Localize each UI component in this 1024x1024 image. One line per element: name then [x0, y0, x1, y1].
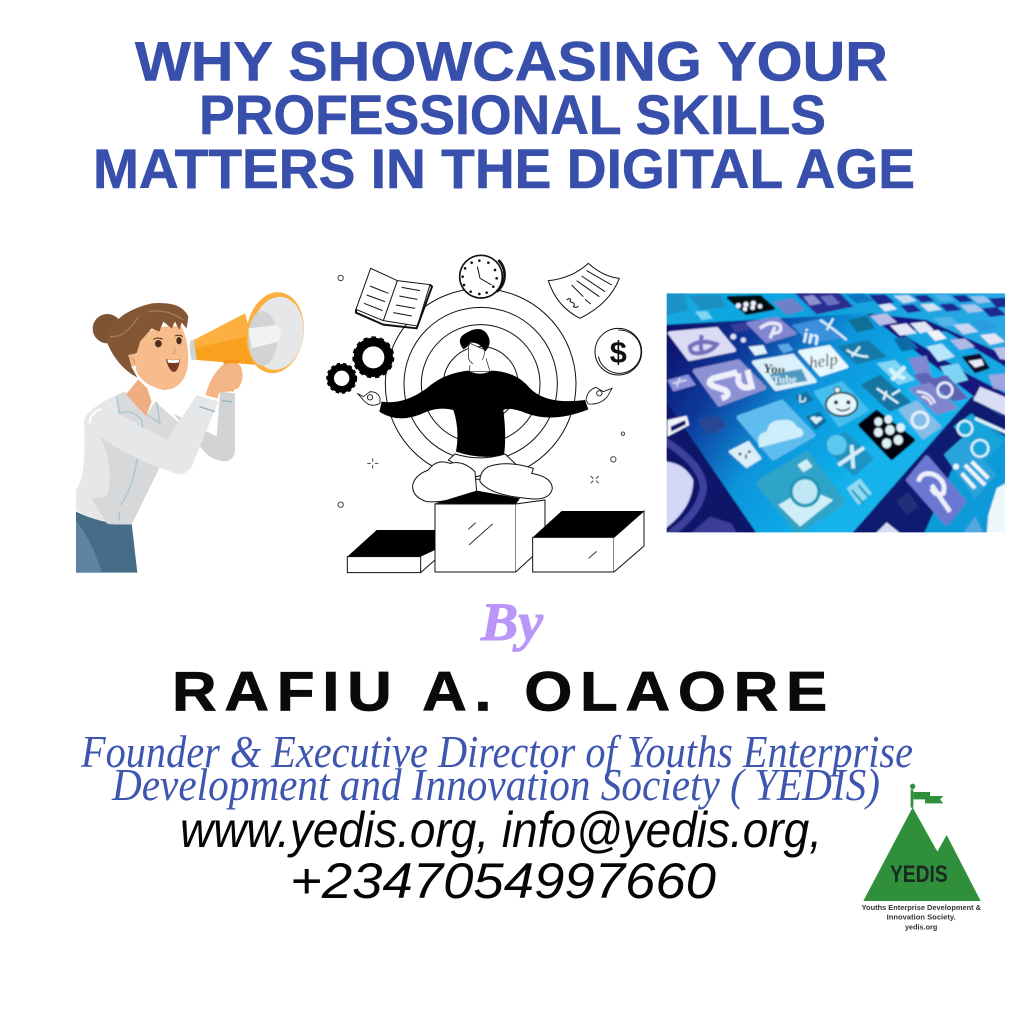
- icon: linkedin lower tile: [947, 438, 993, 495]
- logo caption: Youths Enterprise Development &: [862, 905, 981, 912]
- hand: [205, 363, 243, 398]
- logo caption: [862, 905, 981, 931]
- icon: help tile: help: [808, 349, 839, 372]
- photo: social media app icons: [663, 290, 1008, 538]
- illustration: woman with megaphone: [76, 288, 309, 573]
- far arm: [173, 392, 235, 461]
- icon: glasses and twig tiles: [820, 316, 887, 364]
- shirt: [76, 392, 183, 525]
- mountain: [863, 807, 981, 901]
- icon: pinterest tile: [748, 318, 795, 342]
- lower right panel: [850, 397, 1008, 536]
- crossed legs: [413, 454, 552, 502]
- lower left panel: [663, 397, 758, 536]
- icon: glasses tile: [953, 413, 1008, 460]
- icon: linkedin tile: in: [800, 326, 822, 351]
- founder role: Founder & Executive Director of Youths Enterprise: [80, 727, 913, 777]
- icon: viadeo tile: [670, 329, 734, 359]
- logo: YEDIS: [862, 784, 981, 931]
- icon: lower left circle: [663, 440, 738, 538]
- icon: stumbleupon tile: [695, 362, 764, 404]
- gears: [328, 338, 393, 392]
- open book: [356, 268, 432, 328]
- icon: plane tile: [826, 433, 872, 474]
- icon: pinterest lower tile: [908, 458, 964, 523]
- icon: small tiles: [667, 322, 793, 437]
- logo caption: Innovation Society.: [887, 915, 956, 922]
- hands: [357, 387, 612, 405]
- founder role: Development and Innovation Society ( YEDIS): [111, 760, 880, 810]
- icon: youtube tile: [754, 356, 815, 389]
- author name: RAFIU A. OLAORE: [172, 660, 835, 722]
- tile pattern top right: [847, 293, 1008, 417]
- clock: [460, 255, 505, 298]
- icon: black tile: [861, 412, 913, 458]
- photo background: [663, 290, 1008, 536]
- icon: lower right edge tiles: [873, 482, 1008, 536]
- dollar coin: $: [610, 336, 627, 370]
- icon: pair of dark tiles: [900, 375, 968, 438]
- icon: instagram tile: [760, 455, 872, 530]
- contact details: [180, 802, 822, 909]
- founder role: [80, 727, 913, 810]
- top strip icons: [665, 290, 853, 320]
- hair: [93, 303, 188, 378]
- head and hair: [460, 329, 490, 372]
- main icon panel: [663, 313, 972, 536]
- center podium: [435, 491, 545, 572]
- icon: reddit tile: [816, 383, 867, 425]
- contact details: +2347054997660: [290, 853, 716, 909]
- megaphone: [190, 288, 309, 392]
- title: [93, 30, 915, 200]
- neck: [126, 379, 152, 416]
- paper: [548, 263, 619, 318]
- right podium: [533, 511, 644, 572]
- icon: twig tile: [863, 377, 908, 410]
- dollar coin: [595, 328, 642, 375]
- face details: [153, 335, 183, 372]
- title: MATTERS IN THE DIGITAL AGE: [93, 137, 915, 200]
- logo caption: yedis.org: [905, 924, 937, 931]
- illustration: meditating man: [328, 255, 644, 573]
- icon: small reaction tiles: [730, 392, 827, 467]
- torso and arms: [379, 371, 588, 457]
- title: PROFESSIONAL SKILLS: [199, 83, 826, 146]
- title: WHY SHOWCASING YOUR: [135, 30, 888, 92]
- small dots and sparkles: [338, 275, 625, 507]
- icon: help tile: [800, 347, 847, 375]
- head: [127, 326, 188, 390]
- icon: vk tile: [877, 360, 915, 385]
- flag: [910, 784, 943, 808]
- contact details: www.yedis.org, info@yedis.org,: [180, 802, 822, 858]
- icon: cloud tile: [739, 402, 813, 458]
- concentric circles: [385, 289, 576, 479]
- icon: youtube tile: Tube: [772, 374, 797, 387]
- right navy strip: [867, 313, 1008, 420]
- icon: linkedin tile: [792, 318, 842, 351]
- skirt: [76, 512, 137, 573]
- near arm: [84, 395, 232, 474]
- logo wordmark: YEDIS: [890, 861, 948, 888]
- by label: By: [480, 592, 544, 652]
- left podium: [347, 530, 435, 573]
- icon: youtube tile: You: [762, 360, 787, 378]
